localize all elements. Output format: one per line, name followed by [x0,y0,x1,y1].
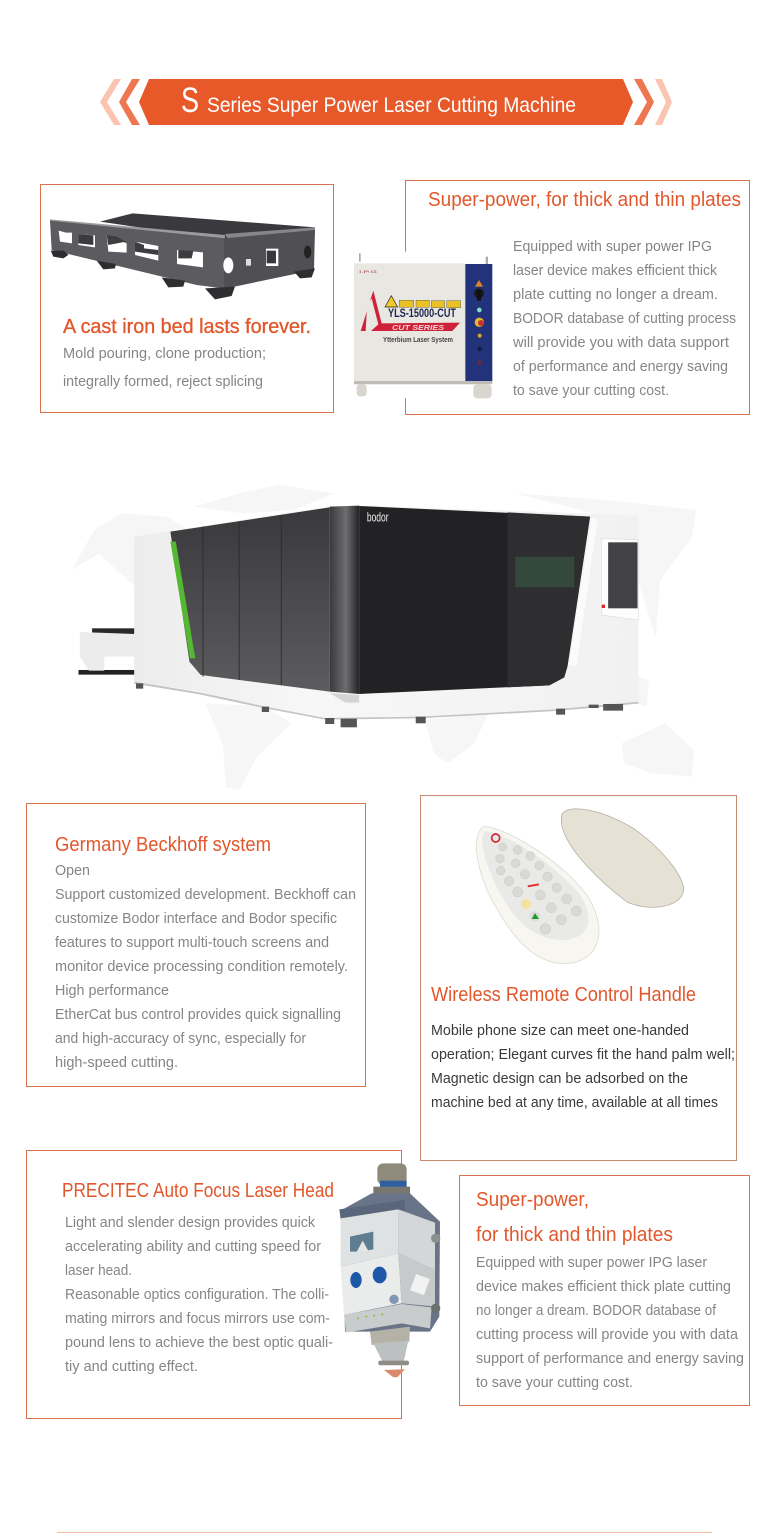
heading: PRECITEC: PRECITEC Auto Focus Laser Head [62,1180,334,1202]
text: PRECITEC description: laser head. [65,1262,132,1279]
text: super-power description: plate cutting no longer a dream. [513,286,718,303]
side table [78,628,135,675]
icon: laser head [339,1163,440,1377]
text: Beckhoff description: and high-accuracy of sync, especially for [55,1030,306,1047]
heading: super-power bottom: for thick and thin plates [476,1224,673,1246]
text: super-power description: to save your cutting cost. [513,382,669,399]
heading: super-power bottom: Super-power, [476,1189,589,1211]
text: PRECITEC description: pound lens to achieve the best optic quali- [65,1334,333,1351]
text: super-power bottom description: no longer a dream. BODOR database of [476,1302,717,1319]
text: remote description: Magnetic design can be adsorbed on the [431,1070,688,1087]
panel: Beckhoff system [26,804,366,1086]
text: super-power description: will provide you with data support [512,334,730,351]
text: Beckhoff description: customize Bodor interface and Bodor specific [55,910,337,927]
text: PRECITEC description: tiy and cutting effect. [65,1358,198,1375]
icon: laser source cabinet [352,252,498,398]
text: super-power description: Equipped with super power IPG [513,238,712,255]
icon: laser source cabinet: Ytterbium Laser System [383,337,453,344]
panel: cast iron bed [40,184,334,412]
text: Beckhoff description: features to support multi-touch screens and [55,934,329,951]
text: PRECITEC description: Light and slender design provides quick [65,1214,315,1231]
text: Beckhoff description: monitor device processing condition remotely. [55,958,348,975]
icon: remote control handles [476,809,684,964]
text: super-power bottom description: cutting process will provide you with data [476,1326,739,1343]
heading: remote: Wireless Remote Control Handle [431,984,696,1006]
text: cast iron bed description: integrally formed, reject splicing [63,373,263,390]
text: super-power description: of performance and energy saving [513,358,728,375]
icon: laser source cabinet: YLS-15000-CUT [388,306,456,320]
text: remote description: machine bed at any time, available at all times [431,1094,718,1111]
text: super-power bottom description: to save your cutting cost. [476,1374,633,1391]
icon: laser source cabinet: CUT SERIES [392,323,444,332]
panel: wireless remote [420,796,736,1160]
text: super-power description [512,238,736,399]
text: Beckhoff description [55,862,356,1071]
text: super-power description: laser device makes efficient thick [513,262,717,279]
text: super-power bottom description [476,1254,744,1391]
text: remote description [431,1022,735,1111]
panel: PRECITEC laser head [26,1150,440,1418]
machine enclosure [134,505,638,719]
text: cast iron bed description: Mold pouring, clone production; [63,345,266,362]
icon: cast iron machine bed [50,213,315,299]
text: cast iron bed description [63,345,266,390]
text: remote description: operation; Elegant curves fit the hand palm well; [431,1046,735,1063]
heading: super-power bottom [476,1189,673,1246]
title banner: Series Super Power Laser Cutting Machine [207,94,576,117]
text: PRECITEC description: Reasonable optics configuration. The colli- [65,1286,329,1303]
text: super-power bottom description: Equipped with super power IPG laser [476,1254,707,1271]
text: super-power bottom description: support of performance and energy saving [476,1350,744,1367]
panel: super-power bottom [460,1176,750,1406]
text: Beckhoff description: high-speed cutting. [55,1054,178,1071]
heading: cast iron bed: A cast iron bed lasts forever. [63,316,311,338]
text: Beckhoff description: High performance [55,982,169,999]
heading: Beckhoff: Germany Beckhoff system [55,834,271,856]
text: PRECITEC description [65,1214,333,1375]
text: remote description: Mobile phone size can meet one-handed [431,1022,689,1039]
text: Beckhoff description: Support customized development. Beckhoff can [55,886,356,903]
machine with world map background: bodor [367,511,389,525]
text: PRECITEC description: accelerating ability and cutting speed for [65,1238,321,1255]
title banner: S [181,81,199,120]
text: Beckhoff description: EtherCat bus control provides quick signalling [55,1006,341,1023]
machine feet [136,683,623,727]
text: Beckhoff description: Open [55,862,90,879]
text: super-power description: BODOR database of cutting process [513,310,736,327]
text: PRECITEC description: mating mirrors and focus mirrors use com- [65,1310,330,1327]
title banner [100,79,672,125]
icon: laser source cabinet: I.P.G [359,269,377,274]
text: super-power bottom description: device makes efficient thick plate cutting [476,1278,731,1295]
heading: super-power: Super-power, for thick and thin plates [428,189,741,211]
world map silhouette [72,485,696,790]
machine with world map background [72,485,696,790]
panel: super-power top [352,180,750,414]
